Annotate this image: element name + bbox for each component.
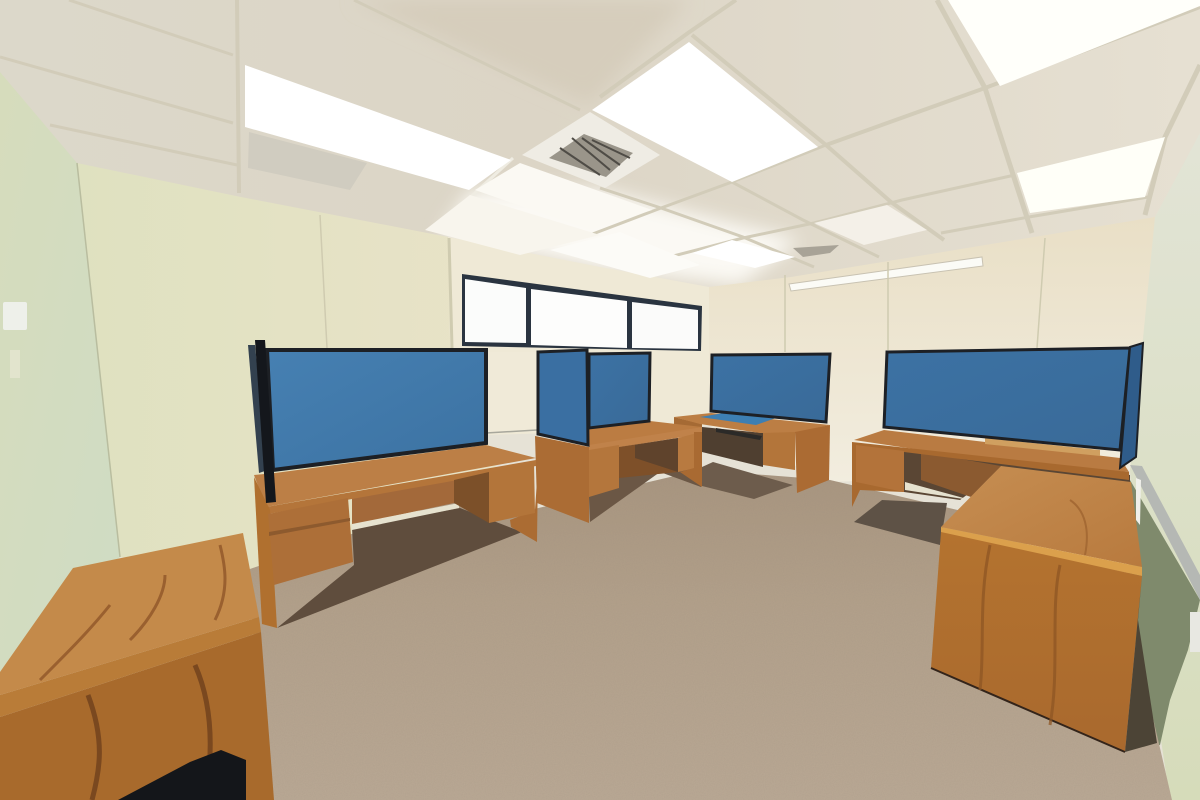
partition: rear wing: [589, 353, 650, 428]
ceiling grid and lights: [0, 0, 1200, 278]
partition: side wing: [248, 345, 268, 473]
light panel: top left: [245, 65, 511, 190]
back wall left section: [77, 163, 520, 572]
partition: [267, 350, 486, 470]
light panel: top right: [948, 0, 1200, 86]
wall seams: [77, 163, 1045, 557]
floor: [247, 470, 1172, 800]
right wall: [1130, 133, 1200, 800]
under-desk shadow: [589, 462, 701, 522]
desk: right: [852, 343, 1143, 507]
back wall right section: [709, 217, 1155, 482]
right wall dark lower panel: [1125, 480, 1200, 750]
under-desk shadow: [277, 508, 522, 628]
thermostat: [3, 302, 27, 378]
window: [462, 274, 702, 351]
trash bin: [118, 750, 246, 800]
wall rail: [1130, 465, 1200, 652]
cabinet: front left: [0, 533, 274, 800]
partition: [884, 348, 1130, 450]
light panel: small far: [692, 240, 795, 268]
left wall: [0, 72, 120, 672]
desk: centre: [535, 350, 702, 523]
vent: far diffuser: [793, 245, 839, 257]
partition: [711, 354, 830, 422]
wall projector lamp: [789, 257, 983, 291]
light panel: middle glow: [475, 163, 652, 230]
light panel: centre: [592, 42, 818, 182]
floor mats: [702, 462, 793, 499]
vent: central air diffuser: [522, 112, 660, 188]
keyboard mat: [700, 413, 776, 425]
vent: grey panel: [248, 132, 367, 190]
ceiling: [0, 0, 1200, 300]
back wall window section: [448, 237, 709, 436]
partition: side wing: [538, 350, 588, 445]
light panel: right: [1017, 137, 1165, 213]
desk: far centre-right: [674, 354, 830, 493]
desk: front right: [931, 466, 1157, 752]
desk: left: [248, 340, 538, 628]
